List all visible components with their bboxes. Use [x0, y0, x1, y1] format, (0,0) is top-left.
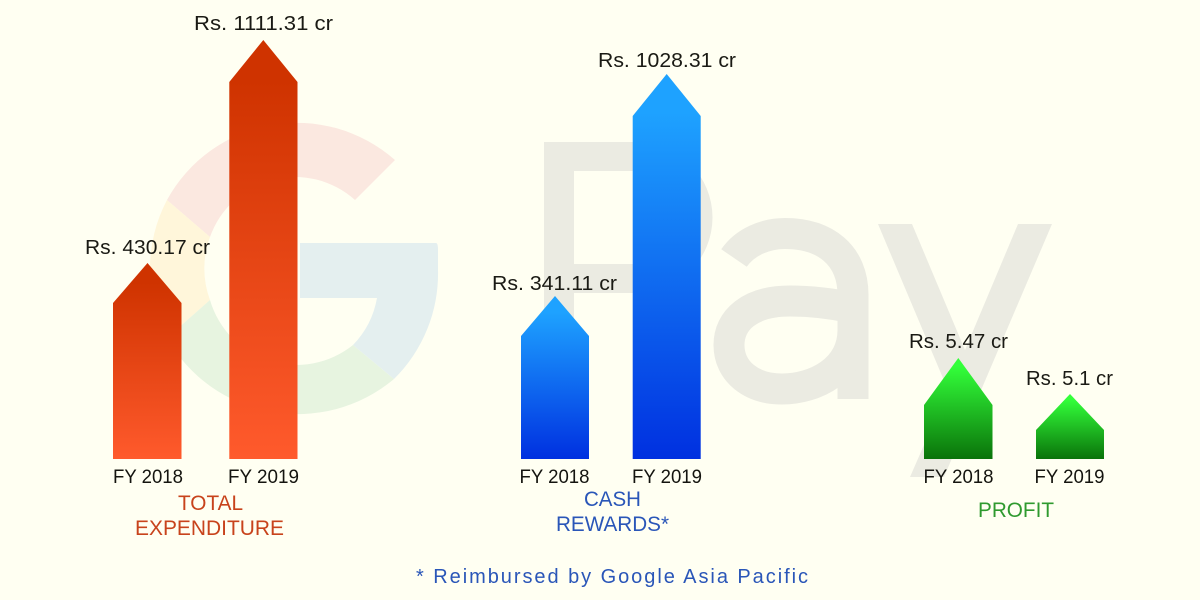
value: rewards FY 2018: Rs. 341.11 cr — [492, 273, 617, 295]
axis label: FY 2019: FY 2019 — [1034, 467, 1104, 488]
panel: total expenditure — [85, 13, 333, 540]
value: profit FY 2018: Rs. 5.47 cr — [909, 331, 1008, 353]
arrow bar: expenditure FY 2019 — [229, 40, 298, 459]
watermark: Google G logo — [150, 123, 438, 414]
arrow bar: profit FY 2019 — [1036, 394, 1104, 459]
axis label: FY 2018: FY 2018 — [113, 467, 183, 488]
heading: total expenditure: EXPENDITURE — [135, 517, 284, 540]
heading: cash rewards — [556, 488, 669, 536]
value: expenditure FY 2018: Rs. 430.17 cr — [85, 237, 210, 259]
arrow bar: expenditure FY 2018 — [113, 263, 182, 459]
arrow bar: rewards FY 2019 — [633, 74, 701, 459]
heading: total expenditure — [135, 492, 284, 540]
heading: cash rewards: REWARDS* — [556, 513, 669, 536]
axis label: FY 2019: FY 2019 — [228, 467, 299, 488]
footnote: * Reimbursed by Google Asia Pacific — [416, 566, 808, 588]
panel: profit — [909, 331, 1113, 522]
value: expenditure FY 2019: Rs. 1111.31 cr — [194, 13, 333, 35]
panel: cash rewards — [492, 50, 736, 536]
axis label: FY 2018: FY 2018 — [924, 467, 994, 488]
heading: total expenditure: TOTAL — [178, 492, 243, 515]
axis label: FY 2019: FY 2019 — [632, 467, 702, 488]
arrow bar: profit FY 2018 — [924, 358, 992, 459]
axis label: FY 2018: FY 2018 — [520, 467, 590, 488]
watermark: Pay wordmark — [544, 142, 1052, 477]
heading: profit: PROFIT — [978, 499, 1054, 522]
value: profit FY 2019: Rs. 5.1 cr — [1026, 368, 1113, 390]
arrow bar: rewards FY 2018 — [521, 296, 589, 459]
heading: cash rewards: CASH — [584, 488, 641, 511]
value: rewards FY 2019: Rs. 1028.31 cr — [598, 50, 736, 72]
